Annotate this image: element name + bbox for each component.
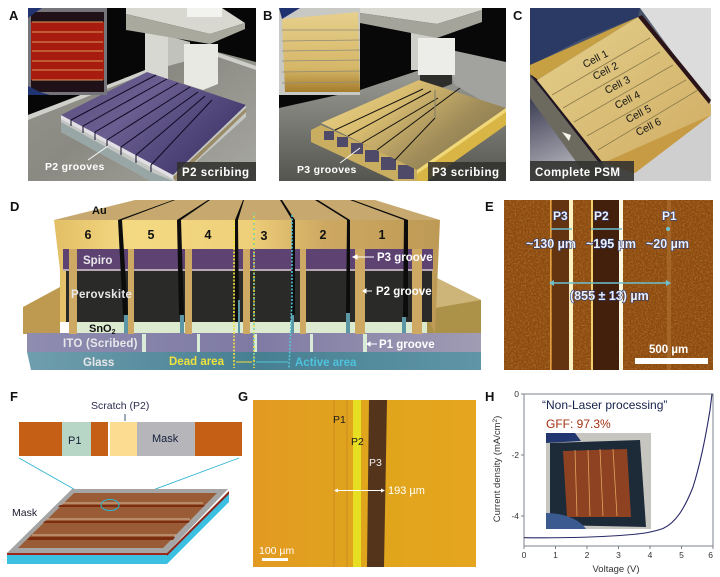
scale bar: 500 µm (649, 344, 688, 356)
dimension labels: P2 (594, 209, 609, 223)
cell numbers: 1 (379, 228, 386, 242)
label: P3 scribing (428, 162, 506, 181)
groove callouts (353, 252, 435, 351)
letter E: E (485, 199, 494, 214)
groove callouts: P2 groove (376, 286, 432, 298)
panel: E micrograph (504, 200, 713, 370)
zoom bar: P1 (68, 435, 81, 447)
letter G: G (238, 389, 248, 404)
tick labels (511, 389, 713, 560)
device top (321, 80, 506, 170)
spiro (63, 249, 433, 269)
cell labels: Cell 4 (613, 89, 642, 112)
tick labels: 5 (679, 550, 684, 560)
letter C: C (513, 8, 523, 23)
panel: F mask schematic (7, 400, 242, 564)
letter H: H (485, 389, 494, 404)
headings: “Non-Laser processing” (542, 398, 667, 412)
panel: G micrograph: P2 (351, 436, 364, 448)
layer labels: Spiro (83, 255, 112, 267)
cell numbers: 4 (205, 228, 212, 242)
inset photo (546, 433, 651, 529)
cell labels: Cell 1 (581, 48, 610, 71)
layer labels: Perovskite (71, 289, 132, 301)
panel: D device cross-section (23, 200, 481, 370)
cell labels: Cell 2 (591, 60, 620, 83)
inset photo A (28, 8, 107, 95)
cell labels: Cell 5 (624, 103, 653, 126)
grooves (118, 200, 408, 322)
letter F: F (10, 389, 18, 404)
dimension labels: P1 (662, 209, 677, 223)
label: SnO2: SnO (89, 323, 112, 335)
tick labels: -2 (511, 450, 519, 460)
scale bar: 100 µm (259, 545, 294, 557)
dimension labels (526, 209, 689, 303)
tick labels: -4 (511, 511, 519, 521)
cell labels: Cell 3 (603, 74, 632, 97)
letter D: D (10, 199, 19, 214)
inset photo B (279, 8, 360, 95)
label: P2 grooves (45, 146, 108, 173)
panel: H JV chart: Current density (mA/cm (492, 423, 503, 522)
panel: C complete PSM (530, 8, 711, 181)
letter A: A (9, 8, 19, 23)
layer labels: Glass (83, 357, 114, 369)
groove callouts: P3 groove (377, 252, 433, 264)
label: P3 grooves: P3 grooves (297, 164, 357, 176)
panel: H JV chart: ) (492, 416, 503, 419)
cell numbers: 5 (148, 228, 155, 242)
label: P2 scribing (177, 162, 256, 181)
dimension labels: P3 (553, 209, 568, 223)
label: P2 scribing: P2 scribing (182, 167, 250, 179)
label: P3 scribing: P3 scribing (432, 167, 500, 179)
tick labels: 2 (585, 550, 590, 560)
tick labels: 0 (514, 389, 519, 399)
base layers (23, 287, 60, 334)
groove callouts: P1 groove (379, 339, 435, 351)
dimension arrow: 193 µm (388, 485, 425, 497)
tick labels: 6 (708, 550, 713, 560)
letter B: B (263, 8, 272, 23)
zoom bar (19, 422, 242, 456)
dimension arrow (334, 485, 425, 497)
dimension labels: ~195 µm (586, 237, 636, 251)
panel: H JV chart (492, 389, 713, 575)
dimension labels: (855 ± 13) µm (570, 289, 649, 303)
label: P2 grooves: P2 grooves (45, 161, 105, 173)
gold pillars (69, 249, 422, 334)
label: P3 grooves (297, 148, 360, 176)
panel: G micrograph (253, 400, 476, 567)
scale bar (635, 344, 708, 364)
scratch label (91, 400, 149, 421)
panel: A P2 scribing (28, 8, 256, 181)
tick labels: 4 (648, 550, 653, 560)
dead and active area markers: Dead area (169, 356, 225, 368)
cell labels (583, 50, 661, 135)
tick labels: 1 (553, 550, 558, 560)
layer labels: ITO (Scribed) (63, 338, 138, 350)
label: Complete PSM: Complete PSM (535, 167, 620, 179)
dead and active area markers (169, 213, 357, 369)
label: SnO2: 2 (112, 329, 116, 336)
zoom bar: Mask (152, 433, 179, 445)
panel: G micrograph: P1 (333, 414, 346, 426)
dimension labels: ~130 µm (526, 237, 576, 251)
device side faces (61, 105, 246, 181)
device top (61, 72, 246, 175)
label: Au: Au (92, 205, 107, 217)
tick labels: 0 (522, 550, 527, 560)
dimension labels: ~20 µm (646, 237, 689, 251)
top surface (54, 200, 440, 220)
panel: H JV chart: GFF: 97.3% (546, 417, 611, 431)
mask label: Mask (12, 507, 38, 519)
panel: B P3 scribing (279, 8, 506, 181)
device (7, 489, 228, 553)
axes (521, 394, 713, 549)
cell numbers: 3 (261, 229, 268, 243)
dead and active area markers: Active area (295, 357, 357, 369)
device front face (311, 125, 417, 181)
cell labels: Cell 6 (634, 116, 663, 139)
cell numbers: 6 (85, 228, 92, 242)
J-V curve (524, 394, 712, 538)
panel: H JV chart: 2 (492, 419, 499, 423)
tick labels: 3 (616, 550, 621, 560)
scratch label: Scratch (P2) (91, 400, 149, 412)
layer labels (63, 255, 138, 369)
label: Complete PSM (530, 161, 634, 181)
panel: G micrograph: P3 (369, 457, 382, 469)
axis titles: Voltage (V) (592, 564, 640, 575)
cell numbers (85, 228, 386, 243)
cell numbers: 2 (320, 228, 327, 242)
